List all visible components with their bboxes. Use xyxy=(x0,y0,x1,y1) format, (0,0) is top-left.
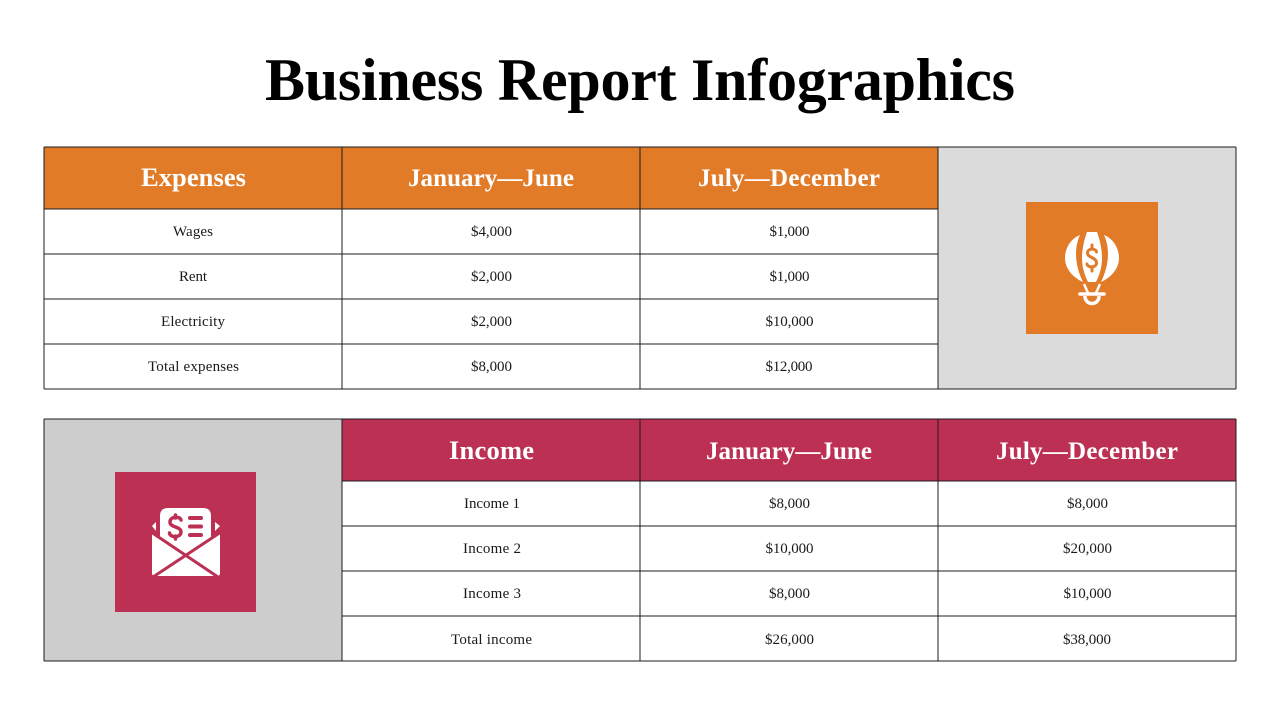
income row: income 1: $8,000 xyxy=(769,496,810,512)
expenses row: wages: Wages xyxy=(173,224,213,240)
expenses column headers: July—December xyxy=(698,165,880,192)
income column headers: July—December xyxy=(996,438,1178,465)
expenses row: rent: $2,000 xyxy=(471,269,512,285)
income column headers: January—June xyxy=(706,438,872,465)
icon: hot air balloon with dollar sign xyxy=(1026,202,1158,334)
panel: income table xyxy=(44,419,1236,661)
panel: expenses table xyxy=(44,147,1236,389)
expenses row: electricity: $2,000 xyxy=(471,314,512,330)
income row: total: Total income xyxy=(451,632,532,648)
expenses icon panel xyxy=(938,147,1236,389)
income row: income 1 xyxy=(464,496,1108,512)
income row: income 3: Income 3 xyxy=(463,586,521,602)
income row: income 1: $8,000 xyxy=(1067,496,1108,512)
expenses row: wages: $1,000 xyxy=(770,224,810,240)
title: Business Report Infographics xyxy=(265,47,1015,113)
expenses row: rent xyxy=(179,269,810,285)
expenses row: total: Total expenses xyxy=(148,359,239,375)
income icon panel xyxy=(44,419,342,661)
income row: total xyxy=(451,632,1111,648)
expenses row: electricity: $10,000 xyxy=(766,314,814,330)
income row: income 1: Income 1 xyxy=(464,496,520,512)
income row: income 2: $20,000 xyxy=(1063,541,1112,557)
income header band xyxy=(342,419,1236,481)
income column headers xyxy=(449,435,1178,465)
income row: income 2: $10,000 xyxy=(766,541,814,557)
income column headers: Income xyxy=(449,435,534,465)
income row: income 3: $8,000 xyxy=(769,586,810,602)
expenses column headers: Expenses xyxy=(141,162,246,192)
expenses row: total xyxy=(148,359,812,375)
expenses row: wages: $4,000 xyxy=(471,224,512,240)
income table grid xyxy=(44,419,1236,661)
expenses row: rent: Rent xyxy=(179,269,208,285)
expenses column headers xyxy=(141,162,880,192)
expenses row: rent: $1,000 xyxy=(770,269,810,285)
expenses column headers: January—June xyxy=(408,165,574,192)
expenses header band xyxy=(44,147,938,209)
expenses row: total: $12,000 xyxy=(766,359,812,375)
income row: income 2: Income 2 xyxy=(463,541,521,557)
expenses table grid xyxy=(44,147,1236,389)
expenses row: electricity: Electricity xyxy=(161,314,226,330)
income row: income 3 xyxy=(463,586,1112,602)
income row: income 2 xyxy=(463,541,1112,557)
income row: total: $26,000 xyxy=(765,632,814,648)
icon: open envelope with dollar letter xyxy=(115,472,256,612)
expenses row: electricity xyxy=(161,314,814,330)
income row: income 3: $10,000 xyxy=(1064,586,1112,602)
income row: total: $38,000 xyxy=(1063,632,1111,648)
expenses row: total: $8,000 xyxy=(471,359,512,375)
expenses row: wages xyxy=(173,224,810,240)
